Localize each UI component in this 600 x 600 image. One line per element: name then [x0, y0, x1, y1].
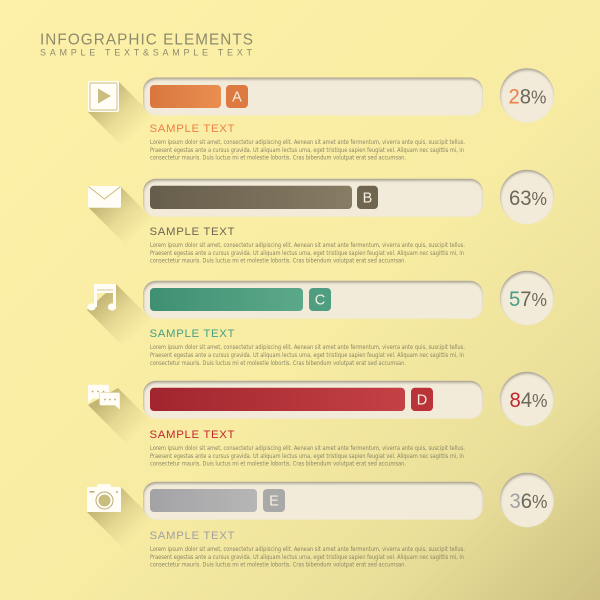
circle value: 28%: [500, 68, 554, 123]
row B: mail progress: [88, 170, 554, 265]
tag E: [263, 489, 285, 512]
tag D: D: [417, 392, 427, 408]
progress track C: [143, 281, 483, 319]
tag C: [309, 288, 331, 311]
body text E: consectetur mauris. Duis luctus mi et molestie lobortis. Cras bibendum volutpat erat sed accumsan.: [150, 563, 406, 569]
row D: chat progress: [88, 372, 554, 468]
row A: video progress: [88, 68, 554, 162]
title: SAMPLE TEXT&SAMPLE TEXT: [40, 47, 253, 57]
body text D: Praesent egestas ante a cursus gravida. Ut aliquam lectus urna, eget tristique sapien feugiat vel. Aliquam nec sagittis mi, in: [150, 454, 464, 460]
heading D: SAMPLE TEXT: [150, 429, 235, 441]
body text B: Praesent egestas ante a cursus gravida. Ut aliquam lectus urna, eget tristique sapien feugiat vel. Aliquam nec sagittis mi, in: [150, 251, 464, 257]
bar C: [150, 288, 303, 311]
body text A: Praesent egestas ante a cursus gravida. Ut aliquam lectus urna, eget tristique sapien feugiat vel. Aliquam nec sagittis mi, in: [150, 148, 464, 154]
heading C: SAMPLE TEXT: [150, 328, 235, 340]
body text C: consectetur mauris. Duis luctus mi et molestie lobortis. Cras bibendum volutpat erat sed accumsan.: [150, 361, 406, 367]
tag B: B: [363, 190, 372, 206]
progress track A: [143, 78, 483, 116]
circle value: 36%: [500, 473, 554, 527]
icon shadow: chat: [88, 388, 163, 450]
bar D: [150, 388, 405, 411]
body text A: [150, 140, 465, 162]
circle value: 84%: 84%: [510, 389, 548, 412]
body text C: [150, 345, 465, 367]
title: INFOGRAPHIC ELEMENTS: [40, 32, 253, 48]
icon: play: [88, 81, 119, 112]
icon shadow: music: [87, 284, 161, 355]
circle value: 36%: 36%: [510, 490, 548, 513]
body text D: consectetur mauris. Duis luctus mi et molestie lobortis. Cras bibendum volutpat erat sed accumsan.: [150, 462, 406, 468]
progress track B: [143, 179, 483, 217]
circle value: 84%: [500, 372, 554, 426]
body text C: Praesent egestas ante a cursus gravida. Ut aliquam lectus urna, eget tristique sapien feugiat vel. Aliquam nec sagittis mi, in: [150, 353, 464, 359]
body text B: [150, 243, 465, 265]
progress track D: [143, 381, 483, 419]
tag A: A: [232, 90, 242, 106]
icon: chat bubbles: [88, 385, 120, 410]
bar A: [150, 85, 221, 108]
progress track E: [143, 482, 483, 520]
icon: camera: [87, 484, 121, 512]
icon: music notes: [87, 284, 116, 311]
row E: camera progress: [87, 473, 554, 569]
circle value: 63%: [500, 170, 554, 224]
body text D: [150, 446, 465, 468]
body text B: consectetur mauris. Duis luctus mi et molestie lobortis. Cras bibendum volutpat erat sed accumsan.: [150, 259, 406, 265]
tag C: C: [315, 292, 325, 308]
body text E: Lorem ipsum dolor sit amet, consectetur adipiscing elit. Aenean sit amet ante fermentum, viverra ante quis, suscipit tellus.: [150, 547, 465, 553]
circle value: 57%: 57%: [509, 288, 547, 311]
tag B: [357, 186, 378, 209]
row C: music progress: [87, 271, 554, 367]
circle value: 57%: [500, 271, 554, 325]
title: [40, 32, 253, 57]
icon shadow: envelope: [88, 187, 166, 252]
circle value: 28%: 28%: [508, 86, 546, 108]
heading E: SAMPLE TEXT: [150, 530, 235, 542]
tag D: [411, 388, 433, 411]
body text C: Lorem ipsum dolor sit amet, consectetur adipiscing elit. Aenean sit amet ante fermentum, viverra ante quis, suscipit tellus.: [150, 345, 465, 351]
heading A: SAMPLE TEXT: [150, 123, 235, 135]
body text A: consectetur mauris. Duis luctus mi et molestie lobortis. Cras bibendum volutpat erat sed accumsan.: [150, 156, 406, 162]
body text E: Praesent egestas ante a cursus gravida. Ut aliquam lectus urna, eget tristique sapien feugiat vel. Aliquam nec sagittis mi, in: [150, 555, 464, 561]
bar B: [150, 186, 352, 209]
body text A: Lorem ipsum dolor sit amet, consectetur adipiscing elit. Aenean sit amet ante fermentum, viverra ante quis, suscipit tellus.: [150, 140, 465, 146]
icon shadow: play: [88, 82, 164, 157]
body text B: Lorem ipsum dolor sit amet, consectetur adipiscing elit. Aenean sit amet ante fermentum, viverra ante quis, suscipit tellus.: [150, 243, 465, 249]
tag E: E: [269, 494, 279, 510]
icon shadow: camera: [87, 487, 166, 557]
body text E: [150, 547, 465, 569]
bar E: [150, 489, 257, 512]
circle value: 63%: 63%: [509, 187, 547, 210]
heading B: SAMPLE TEXT: [150, 226, 235, 238]
icon: envelope: [88, 186, 121, 208]
body text D: Lorem ipsum dolor sit amet, consectetur adipiscing elit. Aenean sit amet ante fermentum, viverra ante quis, suscipit tellus.: [150, 446, 465, 452]
tag A: [226, 85, 248, 108]
